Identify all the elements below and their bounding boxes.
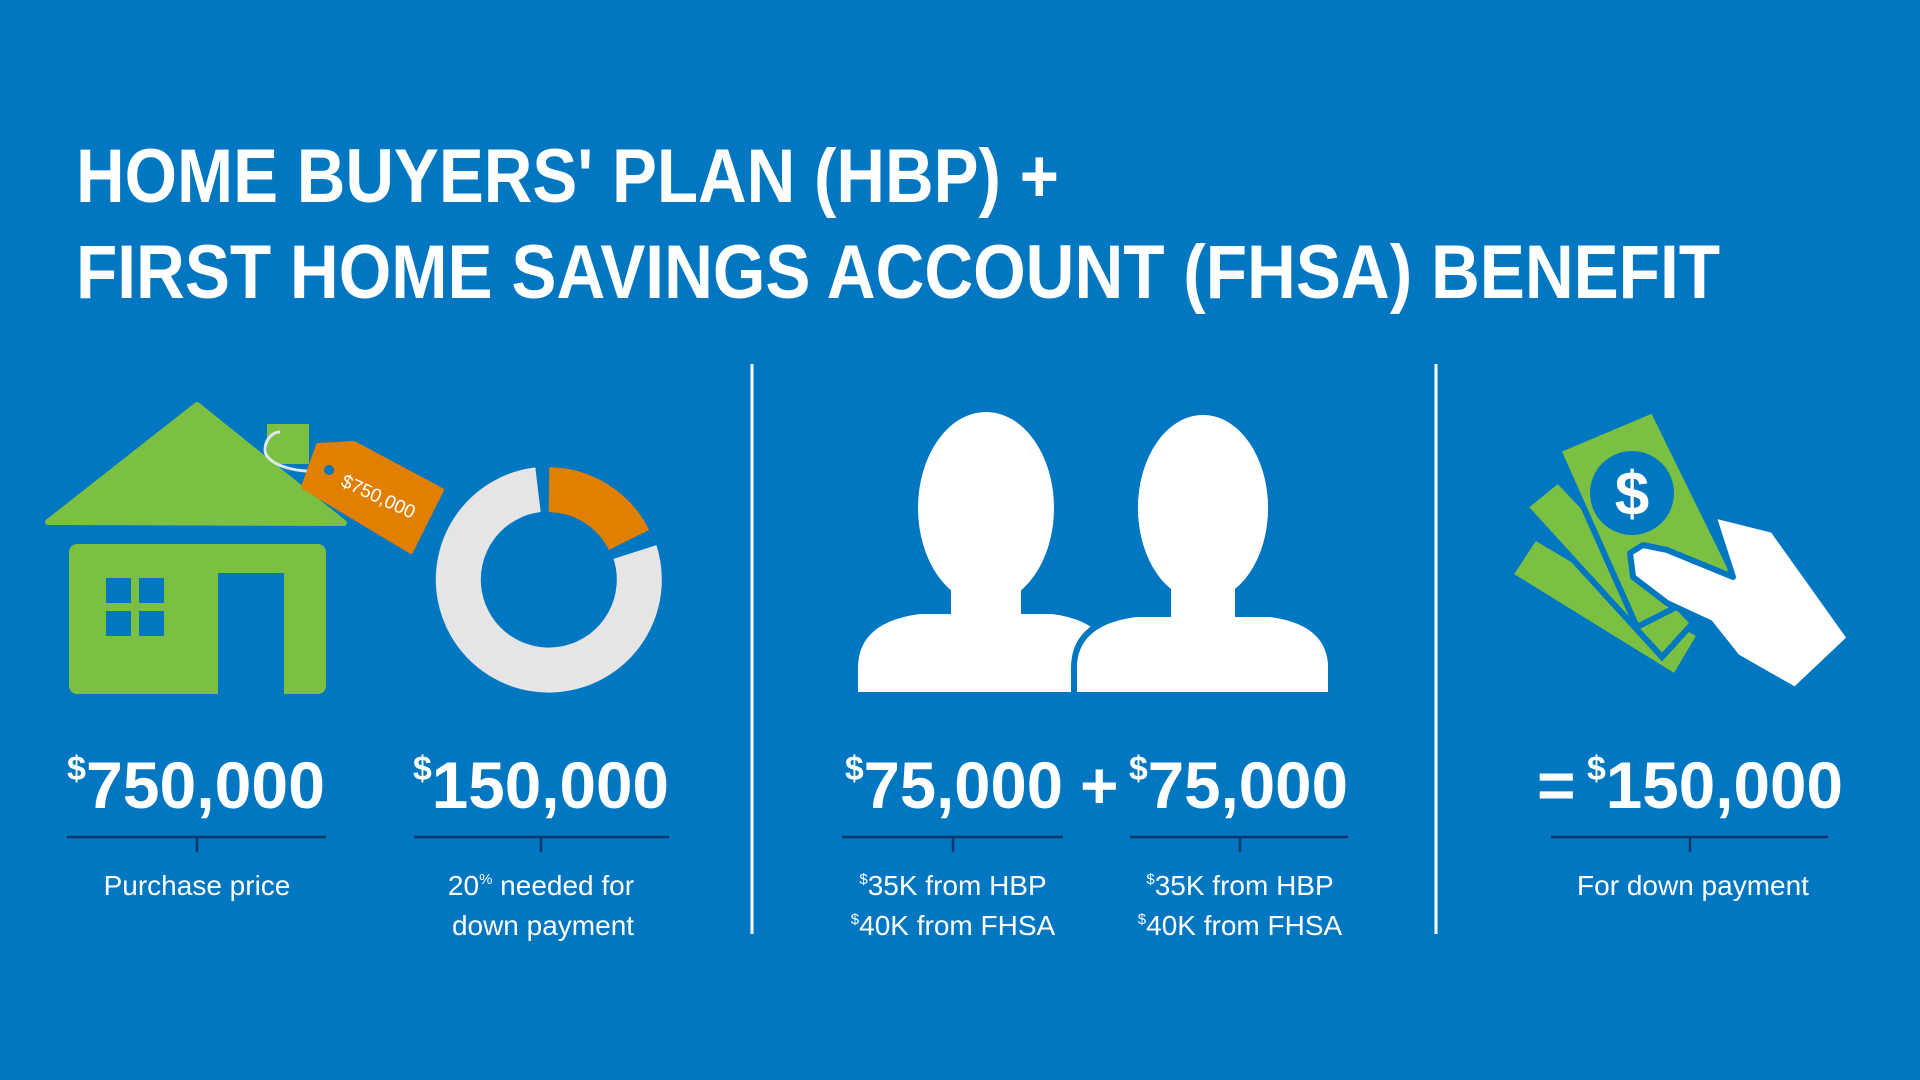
labels: needed for (492, 870, 634, 901)
numbers: $ (1129, 750, 1148, 788)
numbers: $ (413, 750, 432, 788)
icon: two people (858, 412, 1331, 695)
title: FIRST HOME SAVINGS ACCOUNT (FHSA) BENEFIT (76, 230, 1720, 315)
numbers: 75,000 (864, 748, 1063, 822)
labels: For down payment (1577, 870, 1809, 901)
numbers: $ (1587, 750, 1606, 788)
labels: $ (1138, 911, 1147, 928)
labels (104, 870, 1809, 941)
numbers: 750,000 (86, 748, 325, 822)
icon: house with price tag (48, 405, 442, 698)
numbers: $ (845, 750, 864, 788)
labels: 20 (448, 870, 479, 901)
labels: % (479, 871, 492, 888)
icon: hand holding money (1510, 410, 1850, 690)
title: HOME BUYERS' PLAN (HBP) + (76, 134, 1059, 219)
numbers: + (1080, 748, 1119, 822)
labels: 40K from FHSA (1146, 910, 1343, 941)
price tag (303, 443, 442, 552)
labels: $ (859, 871, 868, 888)
labels: Purchase price (104, 870, 290, 901)
icon: hand holding money: $ (1615, 460, 1649, 529)
labels: 35K from HBP (868, 870, 1047, 901)
labels: $ (1146, 871, 1155, 888)
labels: 40K from FHSA (859, 910, 1056, 941)
labels: $ (851, 911, 860, 928)
numbers: 150,000 (1606, 748, 1843, 822)
numbers (67, 748, 1843, 822)
price tag: $750,000 (338, 471, 418, 524)
numbers: = (1537, 748, 1576, 822)
labels: 35K from HBP (1155, 870, 1334, 901)
numbers: 150,000 (432, 748, 669, 822)
labels: down payment (452, 910, 634, 941)
numbers: 75,000 (1148, 748, 1348, 822)
title (76, 134, 1720, 315)
numbers: $ (67, 750, 86, 788)
donut chart: 20% (458, 490, 639, 670)
